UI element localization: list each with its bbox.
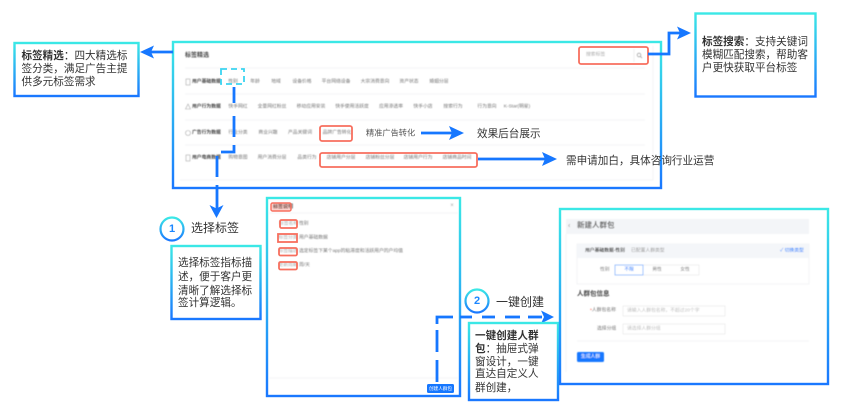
highlight: store tags: [320, 153, 477, 167]
callout: step 2 description: 一键创建人群: [475, 329, 539, 342]
highlight: modal title: [271, 203, 291, 211]
callout: tag selection description: [14, 43, 138, 96]
panel: new audience pack screen: 已配置人群类型: [631, 246, 665, 254]
callout: tag selection description: 供多元标签需求: [22, 75, 96, 88]
row: user behavior data: 快手网红: [228, 102, 248, 110]
panel: new audience pack screen: 女性: [680, 266, 690, 272]
button: create audience pack: 创建人群包: [429, 385, 452, 392]
row: user behavior data: 快手小店: [413, 102, 433, 110]
highlight: brand ad conversion: [320, 126, 352, 141]
panel: tag description modal: 标签说明: [273, 203, 293, 210]
arrow: ad conversion to backend display: [421, 126, 464, 140]
row: user behavior data: 行为意向: [477, 102, 497, 110]
panel: tag description modal: 选定标签下某个app的粘滞度和活跃用户的户均值: [299, 247, 403, 254]
step 2 badge and title: [466, 290, 544, 312]
heading: tag selection: 标签精选: [185, 51, 209, 59]
row: user basic data: 用户基础数据: [192, 78, 221, 84]
highlights: modal fields: [278, 220, 297, 270]
row: ad behavior data: 商业兴趣: [258, 128, 278, 136]
row: ad behavior data: 行业分类: [228, 128, 248, 136]
highlight: dashed gender tag: [221, 69, 244, 84]
callout: step 1 description: 选择标签指标描: [178, 256, 253, 269]
panel: new audience pack screen: 不限: [624, 266, 634, 272]
callout: step 2 description: 窗设计，一键: [475, 355, 539, 368]
callout: step 2 description: 包：抽屉式弹: [475, 342, 539, 355]
row: user e-commerce data: 购物意图: [228, 154, 248, 160]
panel: new audience pack screen: 请选择人群分组: [627, 324, 661, 332]
row: ad behavior data: 产品关键词: [288, 128, 312, 136]
row: user behavior data: 搜索行为: [443, 102, 463, 110]
panel: tag description modal: 用户基础数据: [299, 234, 328, 240]
highlight: search box: [579, 47, 648, 64]
row: user basic data: 性别: [228, 78, 238, 84]
row: user behavior data: 用户行为数据: [192, 102, 221, 110]
arrow: store tags to whitelist note: [478, 152, 557, 166]
panel: new audience pack screen: 选择分组: [597, 324, 616, 332]
panel: tag description modal: ×: [450, 203, 454, 209]
row: ad behavior data: 品牌广告转化: [323, 128, 352, 136]
panel: tag description modal: 标签分类: [278, 234, 298, 240]
row: user e-commerce data: 店铺用户行为: [404, 154, 433, 160]
callout: tag search description: 户更快获取平台标签: [702, 61, 798, 74]
arrow: dashed path from gender tag to step 1: [210, 87, 234, 218]
row: user basic data: 资产状态: [399, 78, 419, 84]
callout: step 2 description: 群创建，: [475, 381, 517, 394]
row: user basic data: 年龄: [250, 78, 260, 84]
callout: tag search description: 模糊匹配搜索，帮助客: [702, 48, 808, 61]
search input: [586, 49, 642, 62]
panel: tag description modal: 周/天: [299, 262, 310, 268]
label: precise ad conversion: 精准广告转化: [366, 128, 415, 138]
callout: tag selection description: 签分类，满足广告主提: [22, 62, 128, 75]
panel: new audience pack screen: 性别: [600, 266, 610, 272]
panel: new audience pack screen: [560, 209, 828, 384]
row: user behavior data: [186, 102, 531, 110]
row: user behavior data: K-Star(明星): [504, 104, 531, 110]
row: user e-commerce data: 用户电商数据: [192, 154, 221, 160]
panel: new audience pack screen: 人群包信息: [577, 288, 610, 298]
row: user e-commerce data: 品类行为: [297, 154, 317, 160]
panel: tag selection main screen: [173, 42, 661, 188]
step 2 badge and title: 2: [474, 295, 480, 307]
callout: tag search description: [696, 14, 816, 96]
panel: new audience pack screen: ‹: [568, 222, 571, 230]
row: user e-commerce data: 店铺粉丝分层: [366, 154, 395, 160]
arrow: dashed path from modal button to audience panel: [437, 310, 554, 382]
row: user basic data: [186, 78, 449, 85]
row: user basic data: 婚姻分层: [429, 78, 449, 84]
row: user e-commerce data: [186, 154, 472, 161]
step 1 badge and title: 选择标签: [191, 220, 239, 235]
callout: step 1 description: 签计算逻辑。: [178, 296, 242, 309]
label: backend display: 效果后台展示: [477, 127, 541, 140]
callout: step 1 description: [172, 246, 260, 319]
search input: 搜索标签: [586, 50, 605, 58]
callout: step 2 description: [469, 323, 558, 400]
callout: tag selection description: 标签精选：四大精选标: [22, 49, 128, 62]
panel: new audience pack screen: *人群包名称: [590, 306, 616, 313]
step 2 badge and title: 一键创建: [496, 295, 544, 309]
row: user behavior data: 全量网红粉丝: [258, 102, 287, 110]
row: ad behavior data: [186, 128, 352, 136]
callout: step 2 description: 直达自定义人: [475, 367, 539, 380]
row: user behavior data: 应用渗透率: [379, 102, 403, 110]
arrow: search to right callout: [648, 26, 691, 54]
row: user basic data: 平台网络设备: [322, 78, 351, 84]
panel: tag description modal: 标签名称: [279, 220, 298, 226]
row: user e-commerce data: 用户消费分层: [258, 154, 287, 160]
button: create audience pack: [427, 384, 454, 393]
panel: new audience pack screen: 请输入人群包名称，不超过20个字: [627, 306, 700, 314]
panel: tag description modal: 性别: [299, 220, 309, 226]
arrow: main panel to left callout: [140, 46, 173, 58]
panel: new audience pack screen: 生成人群: [581, 352, 600, 360]
panel: new audience pack screen: ✓ 切换类型: [780, 246, 804, 254]
row: ad behavior data: 广告行为数据: [192, 128, 221, 136]
row: user behavior data: 移动应用安装: [297, 102, 326, 110]
label: whitelist note: 需申请加白，具体咨询行业运营: [566, 154, 714, 167]
panel: tag description modal: 更新周期: [278, 261, 298, 268]
row: user basic data: 地域: [271, 78, 281, 84]
row: user basic data: 设备价格: [292, 78, 312, 84]
panel: new audience pack screen: 用户基础数据-性别: [585, 246, 625, 254]
row: user basic data: 大宗消费意向: [361, 78, 390, 84]
panel: tag description modal: [267, 198, 460, 396]
step 1 badge and title: [160, 218, 239, 240]
row: user behavior data: 快手使用活跃度: [335, 102, 369, 110]
row: user e-commerce data: 店铺商品时间: [443, 154, 472, 160]
step 1 badge and title: 1: [169, 223, 175, 235]
callout: step 1 description: 清晰了解选择标: [178, 284, 253, 297]
panel: new audience pack screen: 新建人群包: [577, 220, 615, 230]
callout: tag search description: 标签搜索：支持关键词: [702, 35, 808, 48]
panel: new audience pack screen: 男性: [652, 266, 662, 272]
row: user e-commerce data: 店铺用户分层: [327, 154, 356, 160]
panel: tag description modal: 标签描述: [278, 247, 298, 254]
callout: step 1 description: 述，便于客户更: [178, 270, 253, 283]
